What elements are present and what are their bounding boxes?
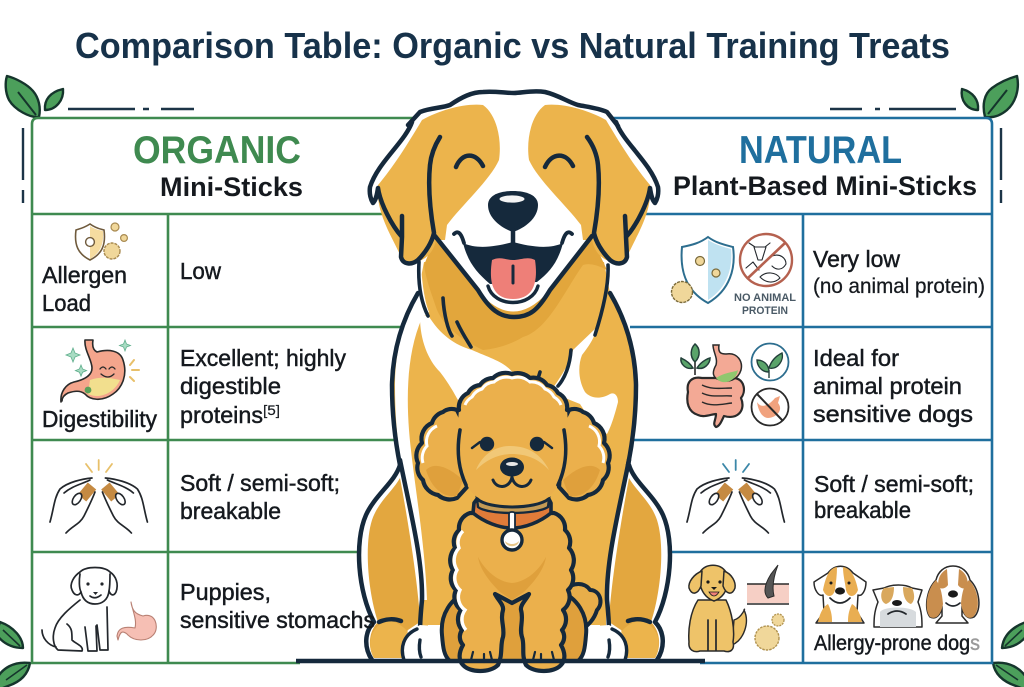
- decorative leaves top right: [962, 76, 1018, 117]
- icon: allergen shield: [76, 223, 127, 260]
- value: digestibility natural: Ideal for: [813, 345, 899, 371]
- head: [370, 91, 658, 312]
- head outline: [408, 91, 618, 126]
- heading: natural: NATURAL: [739, 129, 902, 172]
- label: allergen load: Allergen: [42, 262, 127, 288]
- mouth: [463, 242, 563, 284]
- ears: [416, 409, 467, 499]
- icon: happy stomach: [61, 340, 139, 402]
- value: texture organic: Soft / semi-soft;: [180, 470, 340, 496]
- icon: three dog breeds: [814, 566, 979, 627]
- heading: organic: Mini-Sticks: [160, 172, 303, 202]
- decorative leaves bottom left: [0, 622, 30, 687]
- label: allergen load: [42, 262, 127, 316]
- tongue: [491, 258, 536, 299]
- body: [392, 262, 636, 655]
- happy eyes: [456, 156, 573, 167]
- value: digestibility organic: [180, 345, 346, 428]
- decorative leaves top left: [6, 76, 63, 117]
- body: [450, 513, 574, 671]
- head: [458, 373, 568, 508]
- icon: puppy and stomach: [42, 568, 156, 651]
- heading: organic: [133, 129, 303, 202]
- heading: natural: Plant-Based Mini-Sticks: [673, 171, 977, 201]
- value: texture natural: [814, 471, 974, 523]
- panel: natural table grid: [610, 118, 992, 663]
- value: allergy-prone dogs: Allergy-prone dogs: [814, 632, 980, 655]
- head gold patches: [378, 105, 500, 263]
- neck fur lines: [419, 262, 608, 386]
- label: digestibility: Digestibility: [42, 406, 157, 432]
- value: digestibility natural: animal protein: [813, 373, 962, 399]
- rear thighs: [442, 590, 586, 661]
- value: allergen natural: Very low: [813, 246, 900, 272]
- collar: [473, 499, 551, 528]
- value: digestibility organic: digestible: [180, 373, 281, 399]
- value: texture organic: [180, 470, 340, 524]
- nose: [488, 191, 538, 232]
- caption: no animal protein: NO ANIMAL: [734, 292, 796, 304]
- value: allergen natural: [813, 246, 985, 298]
- large golden dog illustration: [359, 91, 670, 660]
- value: audience organic: Puppies,: [180, 579, 271, 605]
- value: texture natural: Soft / semi-soft;: [814, 471, 974, 497]
- caption: no animal protein: [734, 292, 796, 317]
- value: digestibility organic: [5]: [263, 402, 280, 418]
- neck shade: [424, 238, 607, 350]
- value: digestibility natural: [813, 345, 973, 427]
- value: digestibility organic: Excellent; highly: [180, 345, 346, 371]
- collar tag: [509, 512, 515, 534]
- tail: [566, 584, 601, 630]
- small curly dog illustration: [416, 373, 610, 671]
- icon: hands breaking treat (organic): [50, 460, 147, 533]
- panel: organic table grid: [32, 118, 420, 663]
- icon: golden retriever, skin and spores: [689, 565, 789, 652]
- value: texture organic: breakable: [180, 498, 281, 524]
- ground line: [296, 659, 705, 663]
- heading: natural: [673, 129, 977, 201]
- value: audience organic: [180, 579, 375, 633]
- jaw line: [435, 236, 592, 317]
- value: digestibility natural: sensitive dogs: [813, 401, 973, 427]
- caption: no animal protein: PROTEIN: [742, 305, 788, 317]
- value: audience organic: sensitive stomachs: [180, 607, 375, 633]
- value: digestibility organic: proteins: [180, 402, 263, 428]
- value: allergen natural: (no animal protein): [813, 275, 985, 298]
- value: texture natural: breakable: [814, 497, 911, 523]
- icon: plant, gut and no chicken: [681, 344, 788, 427]
- icon: hands breaking treat (natural): [687, 460, 784, 533]
- title: Comparison Table: Organic vs Natural Training Treats: [75, 25, 950, 66]
- face: [480, 437, 494, 451]
- heading: organic: ORGANIC: [133, 129, 301, 172]
- label: allergen load: Load: [42, 290, 91, 316]
- icon: shield and no animal protein: [672, 234, 792, 303]
- value: low: Low: [180, 258, 221, 284]
- decorative leaves bottom right: [993, 622, 1024, 687]
